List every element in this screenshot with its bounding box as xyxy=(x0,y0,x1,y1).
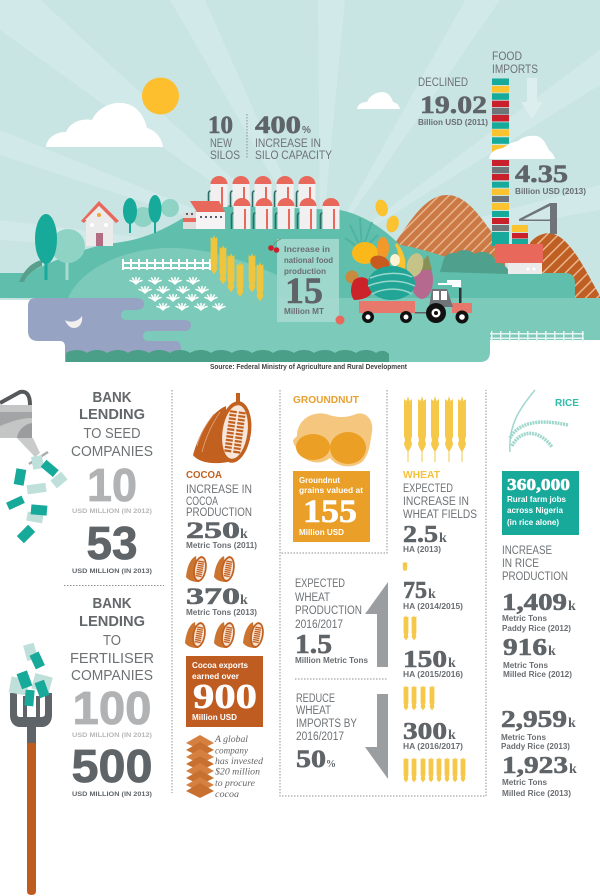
wheat ear rows xyxy=(403,562,465,782)
wheat stats: k xyxy=(439,531,447,546)
front row silos xyxy=(232,198,340,229)
rice production stats: Milled Rice (2013) xyxy=(502,789,571,798)
seed lending: TO SEED xyxy=(84,425,141,442)
crane xyxy=(519,203,557,234)
cloud left xyxy=(46,103,163,147)
rice heading: RICE xyxy=(555,398,579,409)
duck xyxy=(65,316,82,328)
fertiliser lending: USD MILLION (IN 2012) xyxy=(72,732,152,739)
wheat stats: k xyxy=(448,728,456,743)
cocoa exports box: 900 xyxy=(193,677,257,716)
seed lending: 10 xyxy=(87,459,137,511)
wheat stats: HA (2015/2016) xyxy=(403,670,463,679)
cocoa investment note xyxy=(214,735,263,800)
groundnut box: Million USD xyxy=(299,528,344,537)
wheat stats: WHEAT FIELDS xyxy=(403,509,477,521)
rice production stats: Metric Tons xyxy=(501,733,547,742)
upper green land xyxy=(0,205,575,300)
food imports stat xyxy=(418,51,586,196)
silos stat: 10 xyxy=(208,112,233,139)
tree large dark xyxy=(35,214,57,280)
food imports stat: 19.02 xyxy=(420,92,487,119)
rice production stats: Metric Tons xyxy=(502,778,548,787)
cocoa stats: Metric Tons (2013) xyxy=(186,608,257,617)
fertiliser lending: LENDING xyxy=(79,613,145,630)
source line: Source: Federal Ministry of Agriculture and Rural Development xyxy=(210,364,408,371)
rice jobs box: 360,000 xyxy=(507,475,570,494)
produce pile xyxy=(345,198,433,300)
lower green land xyxy=(65,298,600,362)
rice jobs box: Rural farm jobs xyxy=(507,495,567,504)
food imports stat: 4.35 xyxy=(515,161,568,188)
back row silos xyxy=(208,176,316,207)
white crop plants xyxy=(130,278,225,310)
barn xyxy=(183,201,225,229)
wheat stats: HA (2016/2017) xyxy=(403,742,463,751)
icon: cherries xyxy=(268,239,281,253)
white fence right xyxy=(490,331,584,342)
food production panel xyxy=(277,239,339,322)
silos stat: NEW xyxy=(210,138,232,150)
wheat stats: HA (2014/2015) xyxy=(403,602,463,611)
trees behind house xyxy=(123,195,179,233)
food production panel: Increase in xyxy=(284,245,330,254)
seed lending: BANK xyxy=(92,389,132,406)
wheat stats: 150 xyxy=(403,647,447,673)
down arrow xyxy=(365,694,388,779)
dark green hedge xyxy=(440,250,511,274)
left slope leaf xyxy=(19,260,42,282)
rice production stats: k xyxy=(548,644,556,659)
reduce imports stat: REDUCE xyxy=(296,693,335,705)
icon: strawberry xyxy=(336,316,344,324)
wheat production stat: PRODUCTION xyxy=(295,605,362,617)
wheat stats: 300 xyxy=(403,719,447,745)
tractor and trailer xyxy=(359,280,472,324)
rice production stats: PRODUCTION xyxy=(502,571,568,583)
reduce imports stat: 50 xyxy=(296,746,326,773)
rice production stats: k xyxy=(568,599,576,614)
rice production stats: Metric Tons xyxy=(502,614,548,623)
reduce imports stat xyxy=(296,693,357,773)
cocoa stats: COCOA xyxy=(186,470,222,481)
rice jobs box: across Nigeria xyxy=(507,506,564,515)
cocoa investment note: company xyxy=(215,746,249,756)
reduce imports stat: 2016/2017 xyxy=(296,731,344,743)
wheat production stat: EXPECTED xyxy=(295,578,345,590)
fertiliser lending: 500 xyxy=(72,740,152,792)
rice production stats: k xyxy=(569,762,577,777)
groundnut heading: GROUNDNUT xyxy=(293,395,359,406)
food imports stat: Billion USD (2011) xyxy=(418,118,488,127)
lake xyxy=(28,298,191,362)
food imports stat: IMPORTS xyxy=(492,64,538,76)
icon: peanut xyxy=(293,413,372,466)
wheat stats xyxy=(403,470,477,751)
fertiliser lending: USD MILLION (IN 2013) xyxy=(72,791,152,798)
silos stat: % xyxy=(302,125,311,136)
cocoa exports box: earned over xyxy=(192,672,239,681)
cocoa stats xyxy=(185,470,266,649)
cocoa stats: k xyxy=(240,593,248,608)
seed lending: USD MILLION (IN 2012) xyxy=(72,508,152,515)
scalloped hedge xyxy=(66,350,389,362)
sun xyxy=(142,78,179,114)
up arrow xyxy=(365,582,388,667)
rice production stats: Metric Tons xyxy=(503,661,549,670)
groundnut box: 155 xyxy=(303,494,357,530)
food production panel: 15 xyxy=(285,271,323,312)
wheat in field xyxy=(211,235,263,301)
cocoa stats: COCOA xyxy=(186,496,218,508)
silos stat: 400 xyxy=(255,112,301,139)
cocoa stats: k xyxy=(240,527,248,542)
food production panel: production xyxy=(284,267,326,276)
rice jobs box xyxy=(502,471,579,535)
rice production stats: 916 xyxy=(503,635,547,661)
short striped stack xyxy=(512,225,528,245)
down arrow food imports xyxy=(521,78,543,119)
fertiliser lending: TO xyxy=(103,632,121,649)
seed lending: 53 xyxy=(86,517,138,569)
seed lending: COMPANIES xyxy=(71,443,153,460)
cocoa investment note: A global xyxy=(214,735,248,745)
rice production stats: 1,409 xyxy=(502,590,567,616)
cocoa stats: PRODUCTION xyxy=(186,507,252,519)
wheat stats: EXPECTED xyxy=(403,483,453,495)
cocoa stats: 370 xyxy=(186,584,240,609)
icon: stack of cocoa bars xyxy=(186,735,214,798)
wheat production stat: WHEAT xyxy=(295,592,330,604)
wheat production stat: 1.5 xyxy=(295,629,332,659)
cocoa exports box: Cocoa exports xyxy=(192,661,249,670)
fertiliser lending: COMPANIES xyxy=(71,667,153,684)
food imports stat: Billion USD (2013) xyxy=(515,187,586,196)
fertiliser lending xyxy=(70,595,154,798)
cocoa stats: Metric Tons (2011) xyxy=(186,541,257,550)
icon: rice plant xyxy=(510,390,568,452)
red factory building xyxy=(495,244,543,274)
farm house xyxy=(81,201,119,246)
food imports stat: DECLINED xyxy=(418,77,468,89)
fertiliser lending: 100 xyxy=(72,682,152,734)
rice jobs box: (in rice alone) xyxy=(507,518,559,527)
cocoa investment note: cocoa xyxy=(215,790,239,800)
icon: pitchfork with money xyxy=(9,643,53,895)
rice production stats: 2,959 xyxy=(501,707,567,733)
groundnut box: grains valued at xyxy=(299,486,363,495)
rice production stats: Milled Rice (2012) xyxy=(503,670,572,679)
silos stat: SILO CAPACITY xyxy=(255,150,332,162)
reduce imports stat: % xyxy=(326,759,336,770)
wheat production stat: 2016/2017 xyxy=(295,619,343,631)
silos stat: INCREASE IN xyxy=(255,138,321,150)
cocoa stats: INCREASE IN xyxy=(186,484,252,496)
inner light hill xyxy=(68,248,277,298)
cocoa exports box: Million USD xyxy=(192,713,237,722)
cloud over tower xyxy=(489,136,555,159)
seed lending: LENDING xyxy=(79,406,145,423)
seed lending xyxy=(71,389,153,575)
wheat stats: 75 xyxy=(403,578,427,604)
food imports stat: FOOD xyxy=(492,51,522,63)
cloud small xyxy=(357,92,400,109)
rice production stats: 1,923 xyxy=(502,753,568,779)
rice production stats: Paddy Rice (2012) xyxy=(502,624,571,633)
food production panel: national food xyxy=(284,256,333,265)
groundnut box xyxy=(293,471,370,542)
brown striped hill left xyxy=(395,195,505,270)
food imports striped tower xyxy=(492,78,509,246)
brown striped hill right xyxy=(530,233,600,300)
sky background xyxy=(0,0,600,300)
rice production stats: Paddy Rice (2013) xyxy=(501,742,570,751)
wheat stats: 2.5 xyxy=(403,522,438,548)
wheat stats: k xyxy=(448,656,456,671)
icon: watering can xyxy=(0,392,48,464)
icon: falling money xyxy=(6,455,68,543)
wheat production stat xyxy=(295,578,369,665)
cocoa exports box xyxy=(186,656,263,727)
food production panel: Million MT xyxy=(284,307,324,316)
cocoa stats: 250 xyxy=(186,518,240,543)
rice production stats: IN RICE xyxy=(502,558,539,570)
icon: wheat ears large xyxy=(404,396,466,462)
tree large pale xyxy=(51,229,85,280)
reduce imports stat: WHEAT xyxy=(296,705,331,717)
seed lending: USD MILLION (IN 2013) xyxy=(72,568,152,575)
silos stat: SILOS xyxy=(210,150,240,162)
icon: cocoa pod xyxy=(193,393,255,465)
white fence left xyxy=(122,259,211,270)
fertiliser lending: FERTILISER xyxy=(70,650,154,667)
cocoa investment note: has invested xyxy=(215,757,263,767)
wheat stats: k xyxy=(428,587,436,602)
fertiliser lending: BANK xyxy=(92,595,132,612)
rice production stats xyxy=(501,545,577,798)
reduce imports stat: IMPORTS BY xyxy=(296,718,357,730)
groundnut box: Groundnut xyxy=(299,476,340,485)
wheat stats: HA (2013) xyxy=(403,545,441,554)
rice production stats: k xyxy=(568,716,576,731)
cocoa investment note: to procure xyxy=(215,779,255,789)
wheat stats: INCREASE IN xyxy=(403,496,469,508)
silos stat xyxy=(208,112,332,162)
cocoa investment note: $20 million xyxy=(215,766,260,778)
wheat production stat: Million Metric Tons xyxy=(295,656,369,665)
rice production stats: INCREASE xyxy=(502,545,552,557)
wheat stats: WHEAT xyxy=(403,470,440,481)
